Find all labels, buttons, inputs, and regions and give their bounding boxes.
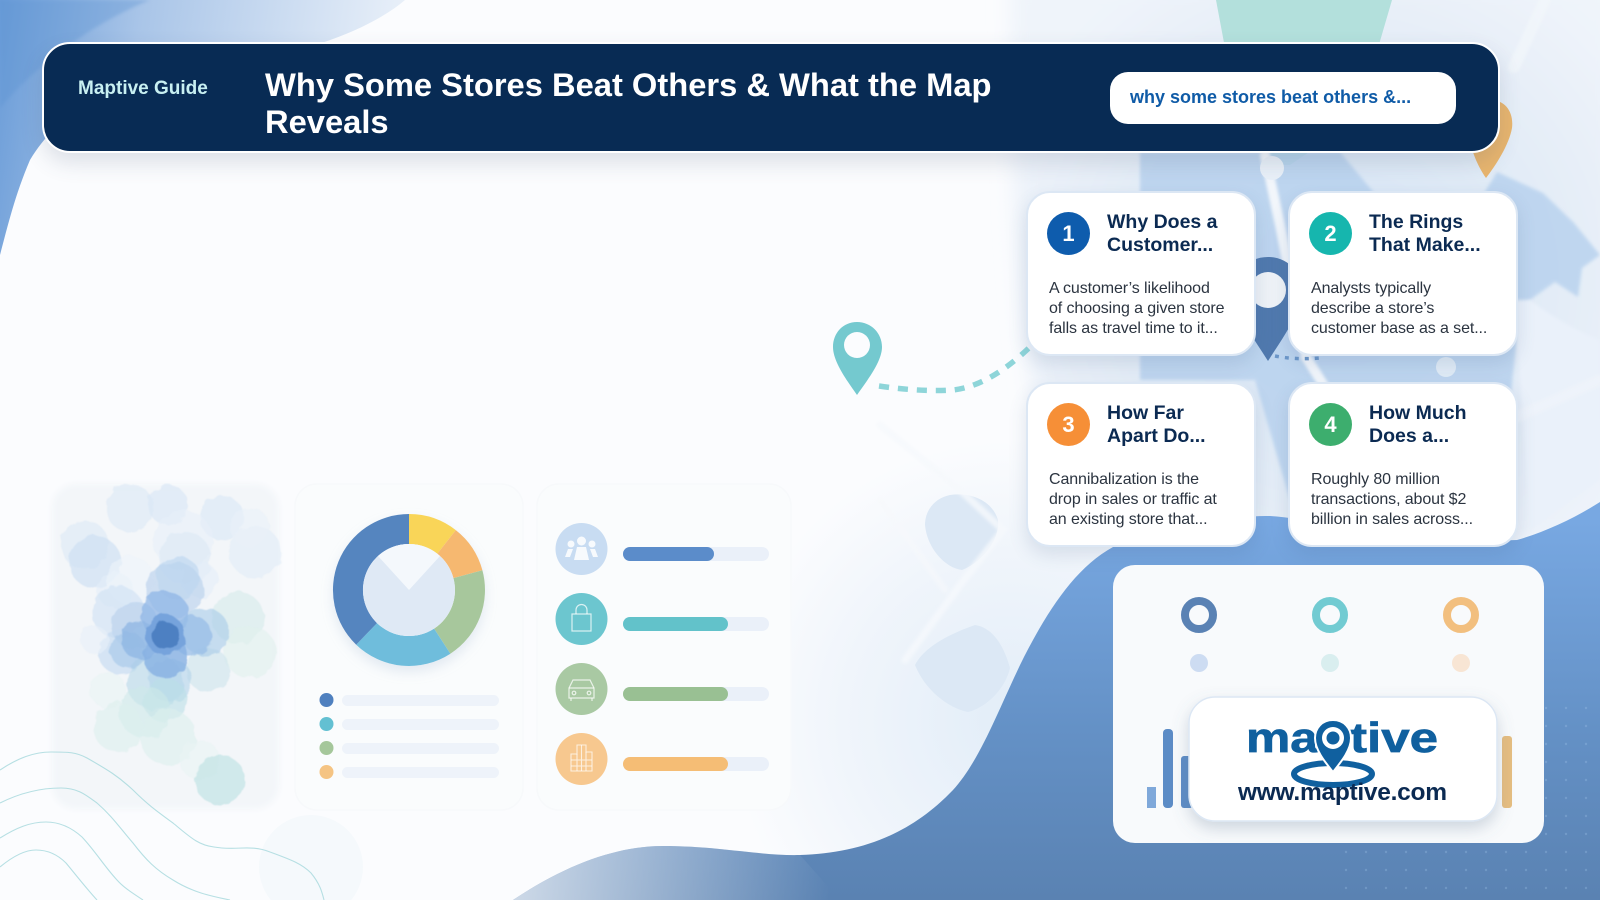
logo wordmark	[1246, 714, 1438, 785]
card 3	[1026, 382, 1256, 547]
card 2 body: describe a store’s	[1311, 300, 1434, 317]
bar chart	[1147, 729, 1512, 808]
faint map blobs	[915, 494, 1010, 712]
card 3 heading	[1107, 402, 1206, 447]
logo wordmark: ma	[1246, 714, 1319, 761]
title: Reveals	[265, 103, 389, 140]
dot texture	[1340, 700, 1600, 900]
card 2 heading: That Make...	[1369, 234, 1481, 256]
icon row: shopping bag	[556, 593, 769, 645]
search pill: why some stores beat others &...	[1130, 87, 1411, 107]
card 3 body: Cannibalization is the	[1049, 471, 1199, 488]
number badge 2	[1309, 212, 1352, 255]
card 3 body	[1049, 471, 1217, 528]
card 1 body	[1049, 280, 1224, 337]
number badge 1	[1047, 212, 1090, 255]
logo wordmark: tive	[1350, 714, 1438, 761]
icon row: buildings	[556, 733, 769, 785]
map tint	[1010, 0, 1600, 570]
card 1 heading: Customer...	[1107, 234, 1213, 256]
card 4 body	[1311, 471, 1473, 528]
map roads	[1265, 0, 1600, 420]
number badge 3	[1047, 403, 1090, 446]
card 3 heading: Apart Do...	[1107, 425, 1206, 447]
card 4	[1288, 382, 1518, 547]
card 1 heading	[1107, 211, 1218, 256]
card 4 body: billion in sales across...	[1311, 511, 1473, 528]
brand label: Maptive Guide	[78, 78, 208, 99]
legend	[320, 693, 499, 779]
card 4 heading: How Much	[1369, 402, 1466, 424]
card 1 body: of choosing a given store	[1049, 300, 1224, 317]
card 1 body: falls as travel time to it...	[1049, 320, 1218, 337]
title: Why Some Stores Beat Others & What the Map	[265, 66, 992, 103]
white wave region	[730, 400, 1120, 870]
map teal zone	[1216, 0, 1392, 165]
header bar	[42, 42, 1500, 153]
number badge 1: 1	[1062, 221, 1075, 246]
faint circle	[259, 815, 363, 900]
title	[265, 66, 992, 140]
card 2 body: Analysts typically	[1311, 280, 1431, 297]
card 4 body: Roughly 80 million	[1311, 471, 1440, 488]
card 1 heading: Why Does a	[1107, 211, 1218, 233]
map blue zone	[1140, 152, 1600, 500]
search pill	[1110, 72, 1456, 124]
card 1	[1026, 191, 1256, 356]
number badge 4: 4	[1324, 412, 1337, 437]
card 4 heading: Does a...	[1369, 425, 1449, 447]
top-left wave	[0, 0, 405, 255]
card 3 body: an existing store that...	[1049, 511, 1207, 528]
card 2 body: customer base as a set...	[1311, 320, 1487, 337]
website address: www.maptive.com	[1237, 779, 1447, 806]
number badge 3: 3	[1062, 412, 1075, 437]
faint road	[880, 425, 1003, 660]
card 2 heading: The Rings	[1369, 211, 1463, 233]
card 2	[1288, 191, 1518, 356]
card 4 body: transactions, about $2	[1311, 491, 1466, 508]
metric dots	[1190, 654, 1470, 672]
blue wave	[513, 502, 1600, 900]
card 2 heading	[1369, 211, 1481, 256]
icon row: car	[556, 663, 769, 715]
card 3 heading: How Far	[1107, 402, 1184, 424]
logo card	[1189, 697, 1497, 821]
number badge 2: 2	[1324, 221, 1337, 246]
donut	[333, 514, 485, 666]
card 4 heading	[1369, 402, 1466, 447]
card 3 body: drop in sales or traffic at	[1049, 491, 1217, 508]
metric rings	[1185, 601, 1475, 629]
card 2 body	[1311, 280, 1487, 337]
card 1 body: A customer’s likelihood	[1049, 280, 1210, 297]
icon row: people	[556, 523, 769, 575]
number badge 4	[1309, 403, 1352, 446]
